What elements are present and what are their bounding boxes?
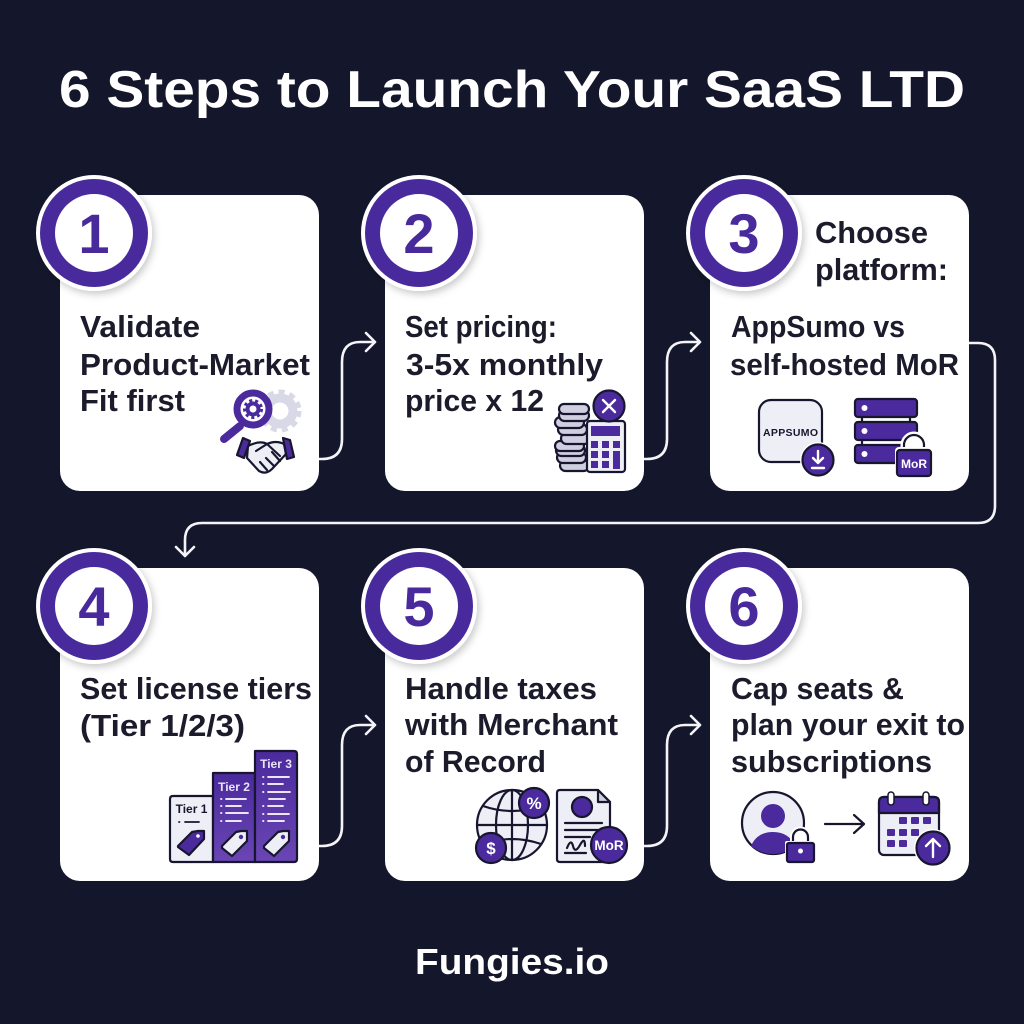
icon: subscription calendar (879, 792, 952, 867)
step 1 text: Fit first (80, 383, 185, 418)
step number 6: 6 (728, 575, 760, 638)
step 2 text (405, 309, 604, 418)
arrow: step 2 to step 3 (644, 333, 700, 459)
step 2 text: 3-5x monthly (406, 347, 604, 382)
panel: step 2 (361, 175, 644, 491)
step number 6 (686, 548, 802, 664)
step 4 text: Set license tiers (80, 671, 312, 706)
icon: AppSumo download (759, 400, 836, 478)
panel: step 3 (686, 175, 969, 491)
step number 4: 4 (78, 575, 110, 638)
step 4 text (80, 671, 312, 743)
icon: locked user seat (742, 792, 816, 864)
step number 2: 2 (403, 202, 435, 265)
step 3 text: self-hosted MoR (730, 347, 959, 382)
step 5 text: with Merchant (404, 707, 618, 742)
icon: AppSumo download: APPSUMO (763, 427, 818, 439)
icon: globe with currency and percent: % (526, 794, 542, 813)
step 3 text: AppSumo vs (731, 309, 905, 344)
step 6 text: plan your exit to (731, 707, 965, 742)
icon: license tier columns: Tier 3 (260, 757, 292, 771)
step 1 text (80, 309, 310, 418)
arrow: step 4 to step 5 (319, 716, 375, 846)
title: 6 Steps to Launch Your SaaS LTD (59, 61, 965, 119)
step 3 text (730, 215, 959, 382)
step number 5: 5 (403, 575, 435, 638)
step 4 text: (Tier 1/2/3) (80, 708, 245, 743)
icon: globe with currency and percent (476, 788, 549, 863)
step 6 text: subscriptions (731, 744, 932, 779)
panel: step 6 (686, 548, 969, 881)
panel: step 1 (36, 175, 319, 491)
icon: magnifier, gear and handshake (224, 392, 299, 473)
footer brand: Fungies.io (415, 941, 609, 982)
icon: arrow to subscriptions (825, 815, 864, 833)
panel: step 4 (36, 548, 319, 881)
step number 2 (361, 175, 477, 291)
icon: MoR document: MoR (594, 838, 624, 853)
icon: MoR document (557, 790, 627, 863)
step number 3: 3 (728, 202, 760, 265)
icon: license tier columns: Tier 1 (176, 802, 208, 816)
step 5 text: Handle taxes (405, 671, 597, 706)
step 5 text (404, 671, 618, 779)
icon: coins and calculator (555, 390, 625, 472)
step 2 text: Set pricing: (405, 309, 557, 344)
step 1 text: Validate (80, 309, 200, 344)
step 3 text: platform: (815, 252, 948, 287)
step 6 text (731, 671, 965, 779)
step number 3 (686, 175, 802, 291)
panel: step 5 (361, 548, 644, 881)
icon: globe with currency and percent: $ (486, 839, 496, 858)
arrow: step 3 to step 4 (176, 343, 995, 556)
step number 1: 1 (78, 202, 110, 265)
icon: license tier columns: Tier 2 (218, 780, 250, 794)
icon: license tier columns (170, 751, 297, 862)
step 2 text: price x 12 (405, 383, 544, 418)
icon: locked MoR server: MoR (901, 457, 927, 471)
icon: locked MoR server (855, 399, 933, 478)
step 3 text: Choose (815, 215, 928, 250)
step number 5 (361, 548, 477, 664)
step 5 text: of Record (405, 744, 546, 779)
arrow: step 1 to step 2 (319, 333, 375, 459)
step number 1 (36, 175, 152, 291)
step number 4 (36, 548, 152, 664)
step 1 text: Product-Market (80, 347, 310, 382)
step 6 text: Cap seats & (731, 671, 904, 706)
arrow: step 5 to step 6 (644, 716, 700, 846)
